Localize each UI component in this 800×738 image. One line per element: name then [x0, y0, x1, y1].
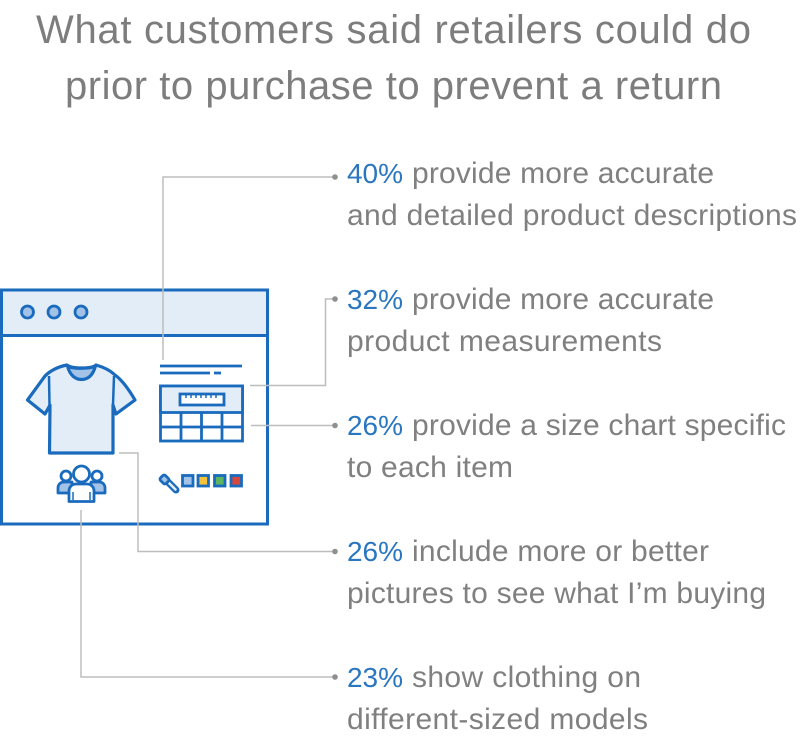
text: 32% measurements: product measurements: [347, 325, 662, 358]
text lines icon: [160, 366, 242, 373]
text: 40% descriptions: and detailed product descriptions: [347, 199, 797, 232]
text: 26% pictures: pictures to see what I’m buying: [347, 577, 766, 610]
text: 26% size chart: to each item: [347, 451, 513, 484]
text: 40% descriptions: 40%: [347, 158, 403, 189]
text: 40% descriptions: [347, 157, 797, 232]
icon: size chart with ruler: [160, 386, 242, 441]
text: 26% size chart: provide a size chart specific: [412, 409, 786, 442]
text: 32% measurements: [347, 283, 714, 358]
text: 26% pictures: 26%: [347, 536, 403, 567]
icon: t-shirt: [28, 365, 135, 453]
connector: size chart: [251, 423, 338, 428]
title: What customers said retailers could do: [36, 8, 751, 52]
icon: eyedropper and colour swatches: [159, 474, 242, 490]
text: 26% size chart: [347, 409, 786, 484]
text: 23% models: different-sized models: [347, 703, 648, 736]
title: prior to purchase to prevent a return: [65, 64, 722, 108]
connector: pictures: [119, 453, 338, 554]
icon: people group: [58, 466, 105, 502]
text: 26% pictures: [347, 535, 766, 610]
browser window illustration: [2, 290, 268, 524]
text: 40% descriptions: provide more accurate: [412, 157, 714, 190]
text: 32% measurements: 32%: [347, 284, 403, 315]
text: 26% size chart: 26%: [347, 410, 403, 441]
text: 23% models: 23%: [347, 662, 403, 693]
title: [36, 8, 751, 108]
text: 32% measurements: provide more accurate: [412, 283, 714, 316]
connector: models: [81, 510, 338, 680]
browser title bar: [2, 290, 268, 336]
connector: product measurements: [250, 296, 338, 386]
text: 23% models: [347, 661, 648, 736]
text: 26% pictures: include more or better: [412, 535, 709, 568]
text: 23% models: show clothing on: [412, 661, 641, 694]
connector: product descriptions: [163, 174, 338, 360]
